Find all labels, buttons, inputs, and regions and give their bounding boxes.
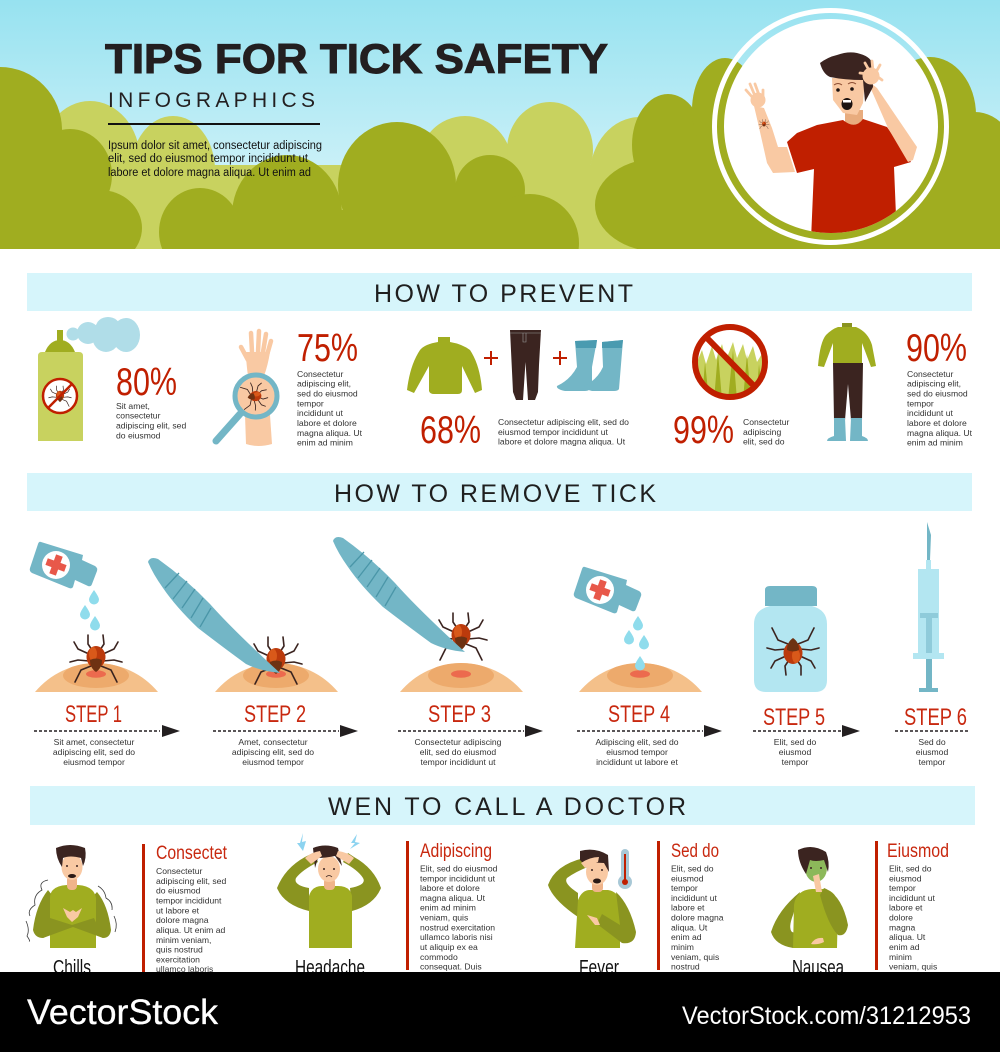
stat: 90%: tempor <box>907 398 934 408</box>
section: how to prevent <box>27 273 973 452</box>
symptom text: sed do: labore et <box>671 903 705 913</box>
symptom text: adipiscing: labore et dolore <box>420 883 480 893</box>
stat: 90%: incididunt ut <box>907 408 953 418</box>
stat: 68%: eiusmod tempor incididunt ut <box>498 427 608 437</box>
title: TIPS FOR TICK SAFETY <box>105 35 608 82</box>
stat: 90% <box>906 327 973 448</box>
step 1 caption: Sit amet, consectetur <box>54 737 134 747</box>
step 4 caption <box>577 701 722 767</box>
symptom text: eiusmod <box>887 841 949 972</box>
stat: 80%: do eiusmod <box>116 430 161 440</box>
intro text: elit, sed do eiusmod tempor incididunt ut <box>108 153 309 165</box>
stat: 80%: 80% <box>116 361 177 404</box>
stat: 68%: labore et dolore magna aliqua. Ut <box>498 437 626 447</box>
symptom text: adipiscing: tempor incididunt ut <box>420 873 496 883</box>
icon: sweater <box>407 337 482 394</box>
step 3 caption: tempor incididunt ut <box>420 757 496 767</box>
symptom: chills <box>26 843 228 979</box>
intro text: labore et dolore magna aliqua. Ut enim ad <box>108 167 311 179</box>
stat: 75%: labore et dolore <box>297 418 357 428</box>
stat: 90%: magna aliqua. Ut <box>907 428 973 438</box>
step 3 caption: STEP 3 <box>428 701 491 728</box>
stat: 99%: 99% <box>673 409 734 452</box>
stat: 90%: 90% <box>906 327 967 370</box>
symptom text: sed do: tempor <box>671 883 698 893</box>
section: how to remove tick <box>27 473 972 767</box>
symptom text: sed do: eiusmod <box>671 873 704 883</box>
heading bar: when to call a doctor: WEN TO CALL A DOCTOR <box>328 793 686 821</box>
symptom text: adipiscing: commodo <box>420 952 458 962</box>
symptom text: adipiscing: nostrud exercitation <box>420 922 495 932</box>
symptom: headache <box>277 833 498 979</box>
step 3 caption: Consectetur adipiscing <box>415 737 502 747</box>
symptom text: consectet: aliqua. Ut enim ad <box>156 925 225 935</box>
step 3 caption <box>398 701 543 767</box>
plus sign <box>484 351 498 365</box>
footer watermark bar: VectorStock <box>27 993 219 1032</box>
heading bar: how to remove tick: HOW TO REMOVE TICK <box>334 480 656 508</box>
icon: repellent spray can <box>38 317 140 441</box>
portrait circle: man with tick bite <box>714 10 946 242</box>
step 4 caption: incididunt ut labore et <box>596 757 678 767</box>
symptom text: eiusmod: eiusmod <box>889 873 922 883</box>
figure: shivering man <box>26 845 116 948</box>
symptom text: consectet: dolore magna <box>156 915 209 925</box>
face <box>832 78 865 115</box>
step 1 caption: STEP 1 <box>65 701 122 728</box>
figure: nauseous man <box>771 847 848 948</box>
stat: 75%: tempor <box>297 398 324 408</box>
symptom text: eiusmod: veniam, quis <box>889 962 937 972</box>
hair <box>820 52 873 102</box>
step 6 caption: eiusmod <box>916 747 948 757</box>
stat: 90%: labore et dolore <box>907 418 967 428</box>
step 2 caption: eiusmod tempor <box>242 757 304 767</box>
stat: 75%: Consectetur <box>297 369 343 379</box>
symptom text: consectet: Consectet <box>156 843 228 864</box>
heading bar: how to remove tick <box>27 473 972 511</box>
stat: 68% <box>420 409 629 452</box>
symptom text: consectet: exercitation <box>156 954 200 964</box>
step 5 caption: STEP 5 <box>763 704 825 731</box>
step 3 illustration <box>333 537 523 692</box>
symptom text: eiusmod: enim ad <box>889 942 920 952</box>
symptom text: adipiscing: consequat. Duis <box>420 962 482 972</box>
step 4 caption: STEP 4 <box>608 701 670 728</box>
stat: 90%: sed do eiusmod <box>907 389 968 399</box>
symptom text: adipiscing: ut aliquip ex ea <box>420 942 478 952</box>
step 2 caption <box>213 701 358 767</box>
step 1 caption: eiusmod tempor <box>63 757 125 767</box>
header banner <box>0 0 1000 249</box>
symptom text: consectet: minim veniam, <box>156 935 211 945</box>
plus sign <box>553 351 567 365</box>
step 2 caption: Amet, consectetur <box>238 737 308 747</box>
symptom text: eiusmod: aliqua. Ut <box>889 932 926 942</box>
step 2 caption: adipiscing elit, sed do <box>232 747 314 757</box>
step 5 caption: tempor <box>782 757 809 767</box>
step 4 illustration <box>574 567 702 692</box>
symptom text: eiusmod: tempor <box>889 883 916 893</box>
step 6 caption: tempor <box>919 757 946 767</box>
symptom text: adipiscing <box>420 841 498 972</box>
footer watermark bar <box>0 972 1000 1052</box>
footer watermark bar: VectorStock.com/31212953 <box>682 1002 971 1030</box>
stat: 75%: magna aliqua. Ut <box>297 428 363 438</box>
symptom text: consectet: adipiscing elit, sed <box>156 876 226 886</box>
symptom: nausea <box>771 841 949 979</box>
label: nausea: Nausea <box>792 957 845 979</box>
symptom text: sed do: nostrud <box>671 962 700 972</box>
symptom text: eiusmod: dolore <box>889 913 913 923</box>
step 6 illustration: syringe <box>913 522 944 692</box>
heading bar: how to prevent <box>27 273 972 311</box>
symptom text: consectet: do eiusmod <box>156 886 201 896</box>
symptom text: eiusmod: incididunt ut <box>889 893 935 903</box>
hills <box>0 57 1000 249</box>
symptom text: adipiscing: enim ad minim <box>420 903 476 913</box>
step 6 caption: STEP 6 <box>904 704 967 731</box>
symptom text: adipiscing: magna aliqua. Ut <box>420 893 486 903</box>
symptom text: consectet: Consectetur <box>156 866 202 876</box>
step 2 illustration <box>148 558 338 692</box>
icon: hand with magnifier <box>216 331 277 446</box>
icon: rubber boots <box>557 340 623 391</box>
symptom text: consectet: quis nostrud <box>156 945 203 955</box>
stat: 75%: incididunt ut <box>297 408 343 418</box>
right hand <box>860 61 882 84</box>
stat: 75%: enim ad minim <box>297 438 353 448</box>
step 6 caption <box>895 704 969 767</box>
stat: 90%: enim ad minim <box>907 438 963 448</box>
label: fever: Fever <box>579 957 619 979</box>
stat: 80%: Sit amet, <box>116 401 150 411</box>
symptom text: sed do: incididunt ut <box>671 893 717 903</box>
right arm <box>872 84 917 162</box>
symptom text: adipiscing: ullamco laboris nisi <box>420 932 493 942</box>
neck <box>845 110 863 125</box>
symptom: fever <box>548 841 724 979</box>
stat: 99%: elit, sed do <box>743 437 785 447</box>
symptom text: adipiscing: Adipiscing <box>420 841 492 862</box>
symptom text: adipiscing: veniam, quis <box>420 913 468 923</box>
symptom text: consectet <box>156 843 228 974</box>
intro text: Ipsum dolor sit amet, consectetur adipiscing <box>108 140 322 152</box>
label: chills: Chills <box>53 957 91 979</box>
symptom text: sed do: minim <box>671 942 694 952</box>
step 1 caption <box>34 701 180 767</box>
step 6 caption: Sed do <box>918 737 946 747</box>
step 5 caption: eiusmod <box>779 747 811 757</box>
section: when to call a doctor <box>26 786 975 979</box>
step 1 caption: adipiscing elit, sed do <box>53 747 135 757</box>
symptom text: eiusmod: Eiusmod <box>887 841 949 862</box>
symptom text: eiusmod: minim <box>889 952 912 962</box>
step 1 illustration <box>30 542 158 692</box>
stat: 75%: sed do eiusmod <box>297 389 358 399</box>
symptom text: consectet: ut labore et <box>156 905 200 915</box>
intro text <box>108 140 322 179</box>
step 5 caption <box>753 704 860 767</box>
stat: 99% <box>673 409 789 452</box>
stat: 99%: Consectetur <box>743 417 789 427</box>
symptom text: eiusmod: Elit, sed do <box>889 864 932 874</box>
symptom text: sed do: veniam, quis <box>671 952 719 962</box>
step 5 caption: Elit, sed do <box>774 737 816 747</box>
icon: no tall grass sign <box>695 327 765 400</box>
symptom text: sed do: dolore magna <box>671 913 724 923</box>
symptom text: sed do <box>671 841 724 972</box>
label: headache: Headache <box>295 957 365 979</box>
step 3 caption: elit, sed do eiusmod <box>420 747 496 757</box>
stat: 68%: 68% <box>420 409 481 452</box>
step 5 illustration: jar <box>754 586 827 692</box>
stat: 68%: Consectetur adipiscing elit, sed do <box>498 417 629 427</box>
stat: 75%: 75% <box>297 327 358 370</box>
figure: man with fever and thermometer <box>548 849 636 948</box>
stat: 75%: adipiscing elit, <box>297 379 351 389</box>
symptom text: eiusmod: magna <box>889 922 915 932</box>
symptom text: adipiscing: Elit, sed do eiusmod <box>420 864 498 874</box>
stat: 75% <box>297 327 363 448</box>
stat: 90%: adipiscing elit, <box>907 379 961 389</box>
symptom text: consectet: tempor incididunt <box>156 896 222 906</box>
step 4 caption: eiusmod tempor <box>606 747 668 757</box>
symptom text: sed do: enim ad <box>671 932 702 942</box>
stat: 80%: consectetur <box>116 411 161 421</box>
symptom text: sed do: Sed do <box>671 841 719 862</box>
heading bar: when to call a doctor <box>30 786 975 825</box>
stat: 99%: adipiscing <box>743 427 781 437</box>
stat: 90%: Consectetur <box>907 369 953 379</box>
step 2 caption: STEP 2 <box>244 701 306 728</box>
symptom text: consectet: ullamco laboris <box>156 964 213 974</box>
symptom text: eiusmod: labore et <box>889 903 923 913</box>
icon: full protective outfit <box>818 323 876 441</box>
heading bar: how to prevent: HOW TO PREVENT <box>374 280 633 308</box>
icon: trousers <box>510 330 541 400</box>
stat: 80% <box>116 361 186 440</box>
left arm <box>746 84 795 173</box>
step 4 caption: Adipiscing elit, sed do <box>595 737 679 747</box>
symptom text: sed do: Elit, sed do <box>671 864 714 874</box>
symptom text: sed do: aliqua. Ut <box>671 922 708 932</box>
figure: man holding head <box>277 833 381 948</box>
shirt <box>787 119 911 240</box>
subtitle: INFOGRAPHICS <box>108 89 315 112</box>
stat: 80%: adipiscing elit, sed <box>116 420 186 430</box>
